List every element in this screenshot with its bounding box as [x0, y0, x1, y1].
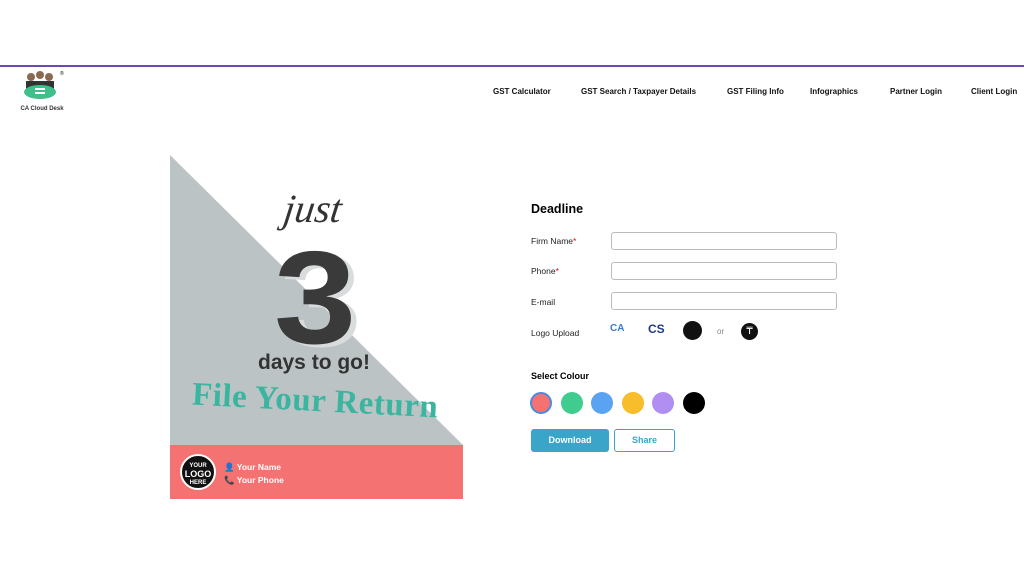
logo: ®	[60, 70, 64, 77]
logo options: CS	[648, 322, 665, 336]
navigation	[493, 87, 1017, 96]
big 3: 3	[274, 224, 356, 371]
text: Logo Upload	[531, 328, 579, 338]
navigation: GST Calculator	[493, 87, 551, 96]
just: just	[281, 186, 345, 231]
logo: CA Cloud Desk	[20, 106, 64, 112]
footer bar: YOUR	[189, 463, 207, 469]
logo	[20, 70, 64, 112]
footer bar: 📞 Your Phone	[224, 475, 284, 485]
footer bar	[170, 445, 463, 499]
navigation: GST Search / Taxpayer Details	[581, 87, 696, 96]
navigation: Partner Login	[890, 87, 942, 96]
logo options: ₸	[746, 326, 753, 337]
File Your Return: File Your Return	[191, 377, 439, 425]
footer bar: HERE	[190, 480, 206, 486]
logo options	[610, 321, 758, 340]
form: Deadline	[531, 202, 583, 216]
text: Select Colour	[531, 371, 589, 381]
navigation: GST Filing Info	[727, 87, 784, 96]
poster	[170, 155, 463, 499]
navigation: Client Login	[971, 87, 1017, 96]
colour swatches	[530, 392, 705, 414]
text: E-mail	[531, 297, 555, 307]
text: Firm Name*	[531, 236, 576, 246]
days to go: days to go!	[258, 351, 370, 374]
navigation: Infographics	[810, 87, 858, 96]
buttons	[531, 429, 609, 452]
footer bar: LOGO	[185, 469, 211, 479]
text: Phone*	[531, 266, 559, 276]
logo options: or	[717, 327, 724, 336]
logo options: CA	[610, 323, 624, 334]
footer bar: 👤 Your Name	[224, 462, 281, 472]
text: Share	[632, 435, 657, 445]
buttons: Download	[548, 435, 592, 445]
